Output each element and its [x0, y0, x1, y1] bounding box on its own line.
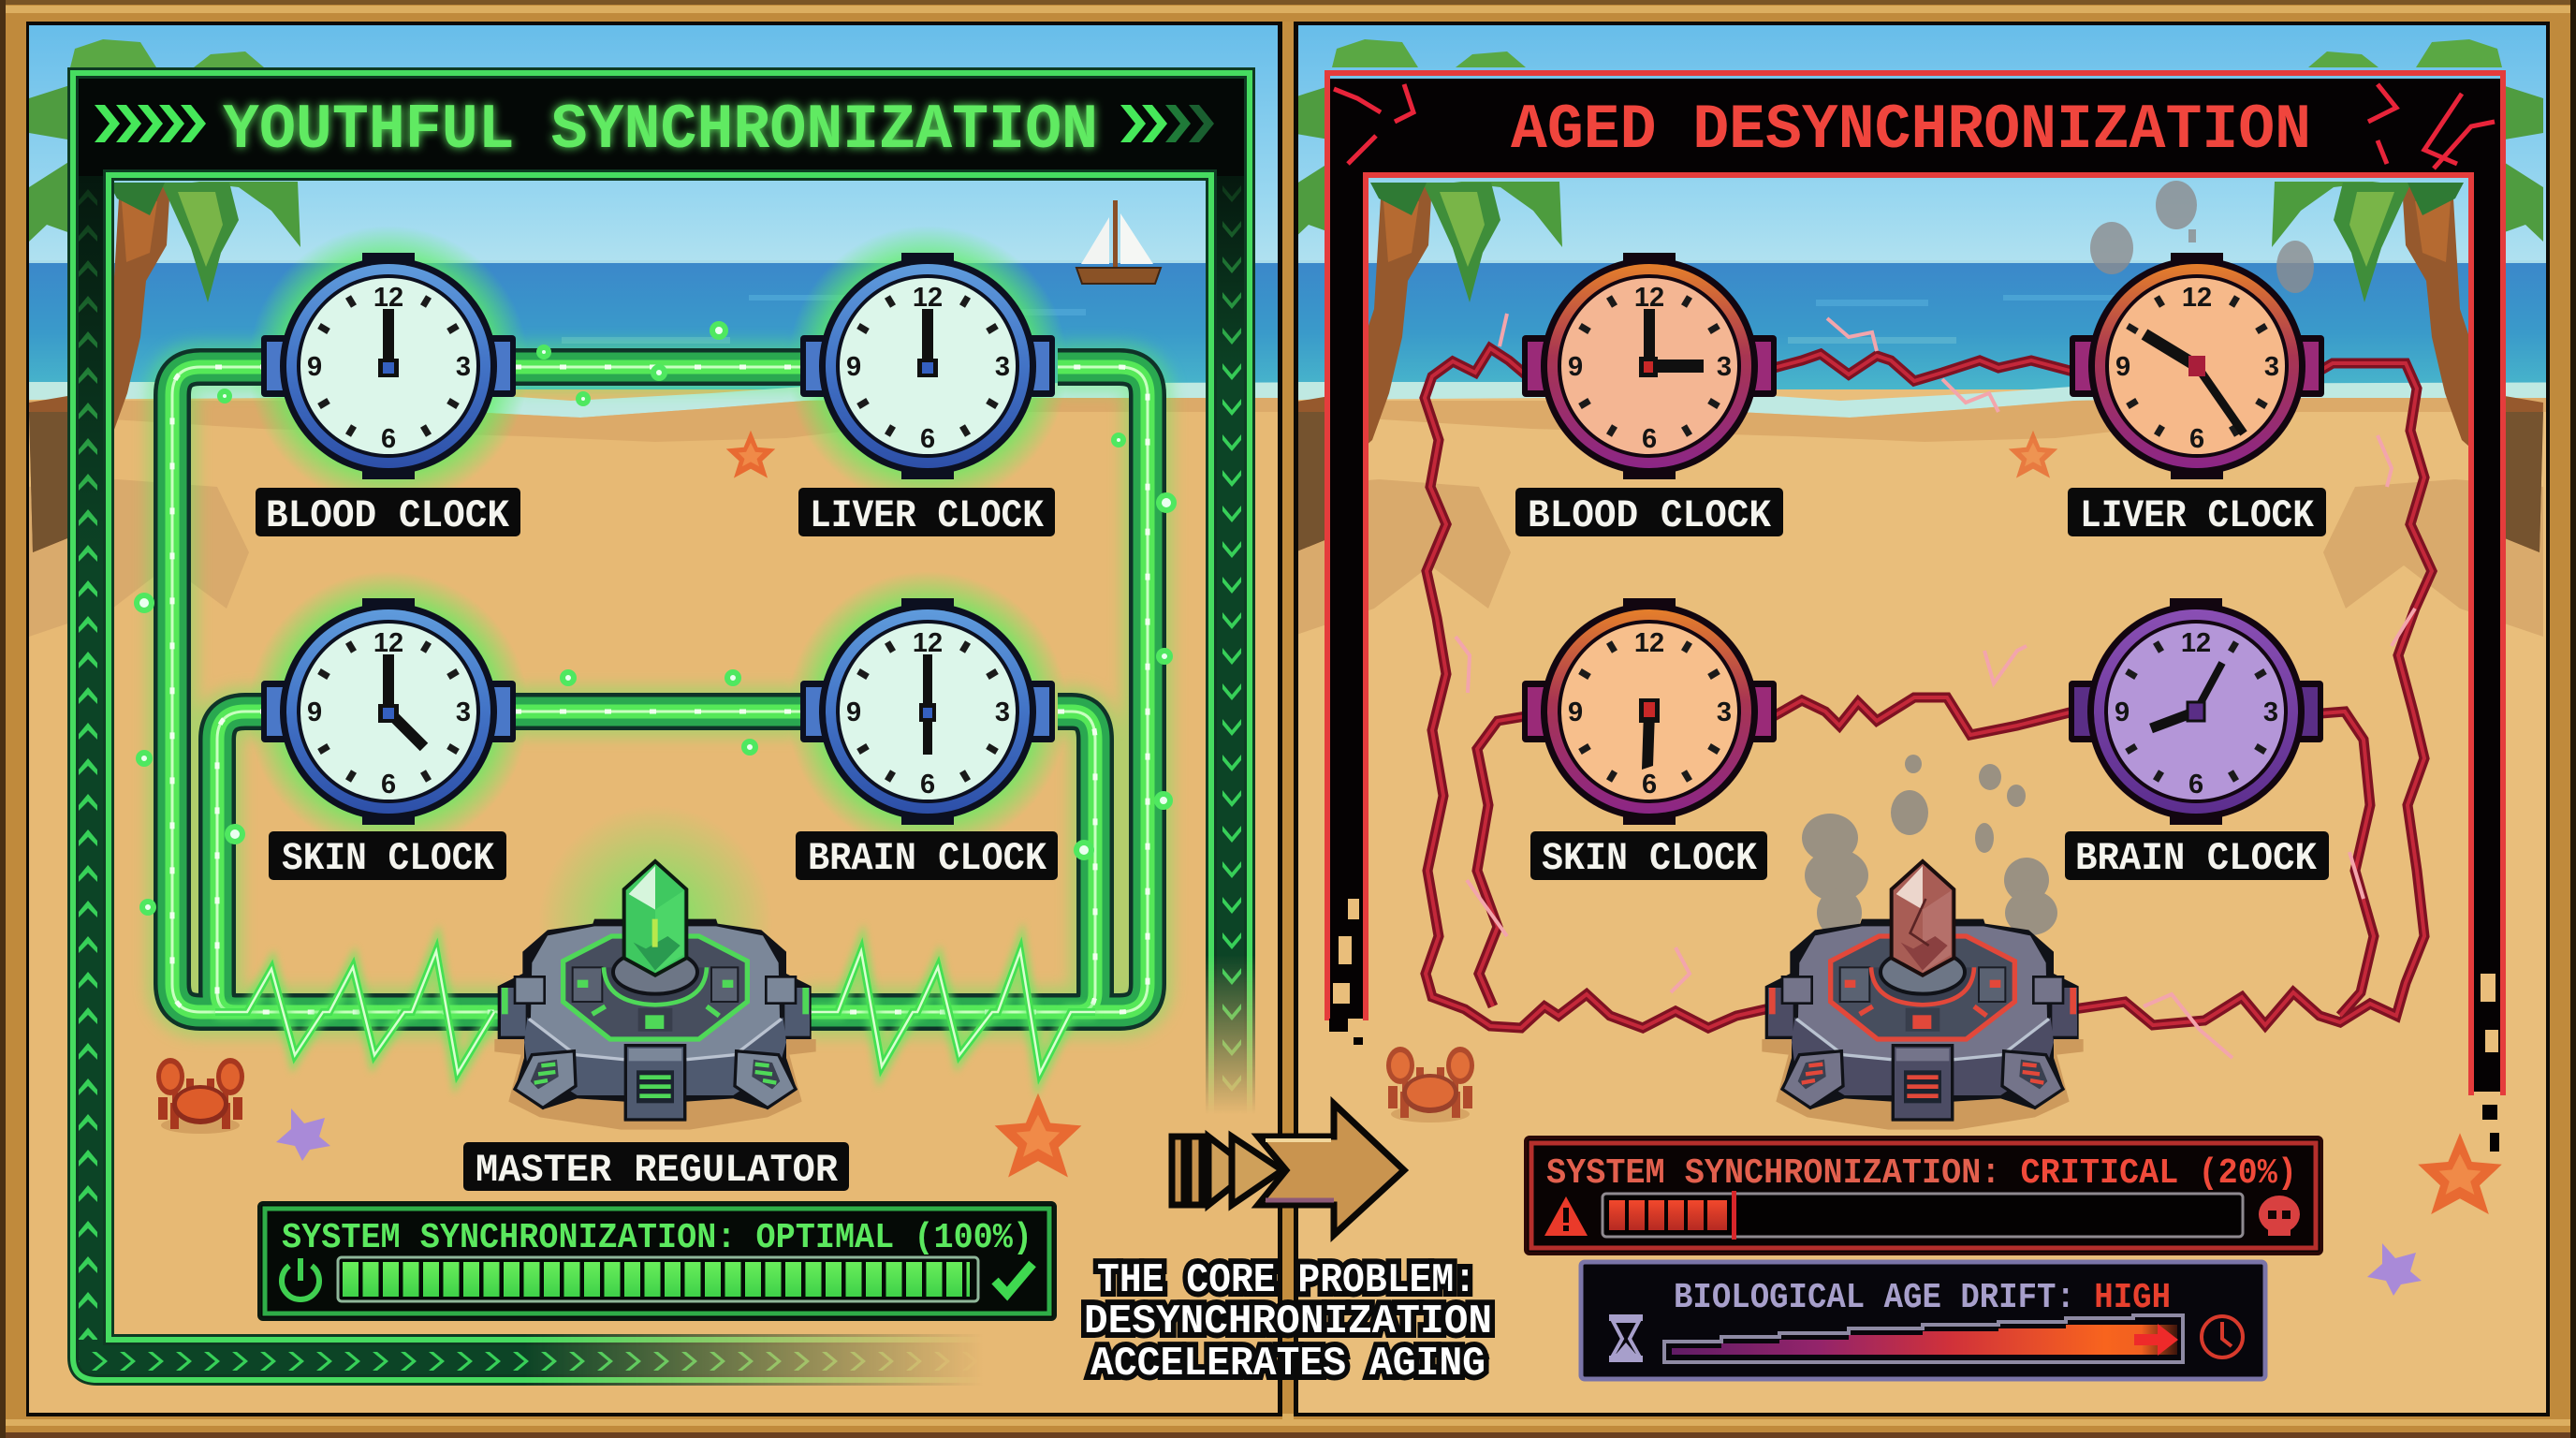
heading: aged desynchronization: AGED DESYNCHRONIZATION — [1511, 95, 2311, 167]
label: liver clock: LIVER CLOCK — [810, 493, 1045, 538]
clock: skin clock aged: 3 — [1717, 697, 1732, 727]
clock: blood clock aged — [1522, 253, 1777, 479]
clock: skin clock youthful — [261, 598, 516, 825]
clock: brain clock aged — [2069, 598, 2323, 825]
line 1: THE CORE PROBLEM: — [1097, 1257, 1476, 1304]
icon: small starfish — [726, 431, 775, 478]
label: skin clock: SKIN CLOCK — [282, 836, 495, 881]
clock: brain clock aged: 3 — [2263, 697, 2278, 727]
line 2: DESYNCHRONIZATION — [1084, 1299, 1492, 1345]
clock: blood clock aged: 3 — [1717, 352, 1732, 382]
status panel: biological age drift — [1581, 1262, 2265, 1379]
status panel: system synchronization critical — [1526, 1137, 2321, 1254]
icon: warning triangle — [1544, 1196, 1588, 1236]
clock: blood clock aged: 12 — [1634, 283, 1664, 313]
drift stepped bar — [1664, 1315, 2183, 1362]
icon: purple starfish aged — [2367, 1243, 2422, 1296]
icon: clock — [2202, 1316, 2243, 1357]
status text: SYSTEM SYNCHRONIZATION: OPTIMAL (100%) — [282, 1218, 1032, 1258]
progress bar full — [338, 1257, 978, 1301]
icon: hourglass — [1609, 1314, 1643, 1362]
clock: liver clock aged — [2070, 253, 2324, 479]
icon: power — [282, 1258, 319, 1299]
title text: YOUTHFUL SYNCHRONIZATION — [223, 95, 1098, 167]
progress bar critical — [1603, 1191, 2243, 1240]
smoke from regulator — [1802, 755, 2057, 937]
clock: liver clock youthful: 12 — [913, 283, 943, 313]
clock: brain clock youthful: 12 — [913, 628, 943, 658]
core problem statement — [1084, 1257, 1492, 1387]
icon: purple starfish — [276, 1108, 330, 1161]
label: liver clock aged: LIVER CLOCK — [2080, 493, 2315, 538]
icon: palm tree right of aged panel — [2272, 39, 2543, 637]
left chevrons — [95, 105, 206, 142]
right chevrons — [1120, 105, 1214, 142]
clock: brain clock youthful: 9 — [846, 697, 861, 727]
clock: brain clock aged: 6 — [2188, 770, 2203, 800]
clock: brain clock aged: 9 — [2115, 697, 2130, 727]
clock: brain clock youthful: 3 — [995, 697, 1010, 727]
label: skin clock aged: SKIN CLOCK — [1542, 836, 1758, 881]
clock: liver clock aged: 12 — [2182, 283, 2212, 313]
icon: palm tree — [29, 39, 300, 637]
clock: liver clock aged: 6 — [2189, 424, 2204, 454]
clock: liver clock youthful: 6 — [920, 424, 935, 454]
ECG pulse waveform — [215, 951, 1095, 1073]
clock: skin clock youthful: 9 — [307, 697, 322, 727]
clock: liver clock aged: 3 — [2264, 352, 2279, 382]
clock: skin clock youthful: 12 — [373, 628, 403, 658]
clock: brain clock youthful: 6 — [920, 770, 935, 800]
icon: orange starfish aged — [2418, 1133, 2502, 1214]
clock: liver clock youthful — [800, 253, 1055, 479]
center divider — [1278, 22, 1298, 1419]
label: brain clock aged: BRAIN CLOCK — [2075, 836, 2318, 881]
master regulator device aged — [1762, 861, 2084, 1130]
icon: palm tree left of aged panel — [1291, 39, 1562, 637]
icon: crab — [156, 1058, 244, 1134]
icon: orange starfish — [995, 1093, 1081, 1178]
clock: blood clock aged: 9 — [1568, 352, 1583, 382]
clock: skin clock aged: 6 — [1642, 770, 1657, 800]
clock: skin clock aged: 9 — [1568, 697, 1583, 727]
clock: blood clock youthful: 3 — [456, 352, 471, 382]
icon: skull — [2259, 1196, 2300, 1236]
panel: youthful background beach — [29, 25, 1278, 1413]
label: brain clock: BRAIN CLOCK — [808, 836, 1047, 881]
clock: blood clock youthful: 9 — [307, 352, 322, 382]
clock: brain clock youthful — [800, 598, 1055, 825]
clock: liver clock aged: 9 — [2115, 352, 2130, 382]
master regulator device youthful — [494, 861, 816, 1130]
clock: skin clock youthful: 6 — [381, 770, 396, 800]
clock: blood clock youthful: 12 — [373, 283, 403, 313]
clock: blood clock youthful: 6 — [381, 424, 396, 454]
crystal cracked — [1892, 861, 1954, 976]
crystal green — [624, 861, 686, 976]
red broken wires — [1425, 348, 2432, 1028]
clock: blood clock aged: 6 — [1642, 424, 1657, 454]
clock: skin clock youthful: 3 — [456, 697, 471, 727]
clock: brain clock aged: 12 — [2181, 628, 2211, 658]
energy particles — [137, 324, 1174, 913]
arrow: from youthful to aged — [1172, 1104, 1404, 1235]
label: blood clock aged: BLOOD CLOCK — [1528, 493, 1772, 538]
status panel: system synchronization optimal — [259, 1203, 1055, 1319]
label: master regulator: MASTER REGULATOR — [476, 1148, 839, 1193]
panel frame: green double border — [73, 73, 1250, 1383]
clock: blood clock youthful — [261, 253, 516, 479]
clock: liver clock youthful: 9 — [846, 352, 861, 382]
clock: skin clock aged — [1522, 598, 1777, 825]
icon: sailboat — [1076, 200, 1161, 284]
clock: skin clock aged: 12 — [1634, 628, 1664, 658]
status text: SYSTEM SYNCHRONIZATION: CRITICAL (20%) — [1546, 1153, 2297, 1194]
icon: small starfish aged — [2009, 431, 2057, 478]
green synchronized pipes — [172, 367, 1148, 1012]
clock: liver clock youthful: 3 — [995, 352, 1010, 382]
clock glow halos — [248, 226, 1068, 1039]
drift text: BIOLOGICAL AGE DRIFT: HIGH — [1674, 1278, 2171, 1318]
electric sparks — [1456, 314, 2415, 1058]
icon: crab aged — [1386, 1047, 1474, 1123]
icon: check — [995, 1264, 1032, 1294]
heading: youthful synchronization — [95, 95, 1214, 167]
smoke above liver clock — [2090, 181, 2314, 293]
line 3: ACCELERATES AGING — [1090, 1341, 1486, 1387]
label: blood clock: BLOOD CLOCK — [266, 493, 510, 538]
panel frame: broken red double border — [1327, 73, 2505, 1152]
panel: aged background beach — [1298, 25, 2546, 1413]
